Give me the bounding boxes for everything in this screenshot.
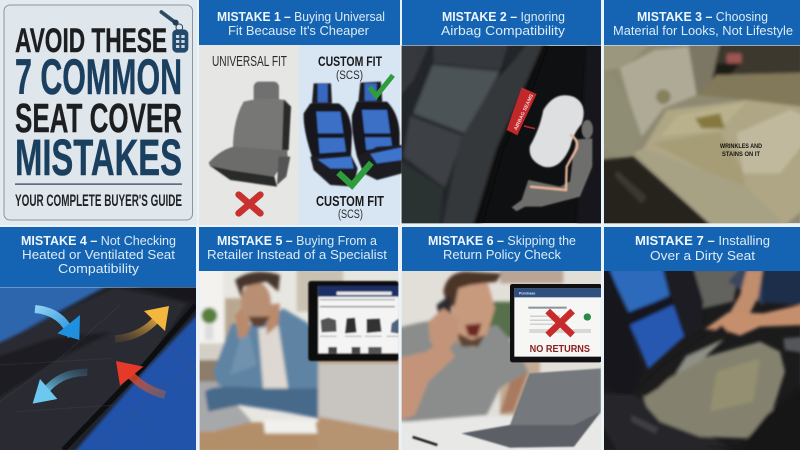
photo: leather seat with airbag [402,46,601,224]
icon: green check top [370,75,393,96]
airbag illustration [530,95,584,167]
arrow: light blue cooling bottom [33,372,87,404]
header: mistake 4 [0,227,196,287]
icon: green check bottom [338,163,371,185]
heading: mistake 1 line 2: Fit Because It's Cheaper [228,23,370,38]
panel: mistake 3 [600,0,800,230]
heading: mistake 3 line 1: MISTAKE 3 – Choosing [637,9,768,24]
laptop screen: no returns: Purchase [519,291,535,295]
header: mistake 3 [604,0,800,45]
header: mistake 1 [199,0,400,45]
custom side background [299,45,400,225]
subtitle: YOUR COMPLETE BUYER'S GUIDE [15,191,182,210]
grey universal seat [209,82,291,187]
panel: mistake 5 [197,227,405,450]
seated mannequin illustration [512,120,593,211]
header: mistake 5 [199,227,398,271]
laptop with online store [308,281,399,361]
heading: mistake 5 line 2: Retailer Instead of a Specialist [207,247,387,262]
heading: mistake 7 line 2: Over a Dirty Seat [650,248,755,263]
photo: installing cover over dirty seat [600,268,800,450]
header: mistake 2 [402,0,601,45]
label: no returns: NO RETURNS [530,344,590,355]
label: scs bottom: (SCS) [338,209,363,221]
heading: mistake 5 line 1: MISTAKE 5 – Buying From a [217,233,378,248]
heading: mistake 6 line 2: Return Policy Check [443,247,561,262]
photo: worn stained leather seat [600,40,800,230]
heading: mistake 6 line 1: MISTAKE 6 – Skipping the [428,233,576,248]
panel: mistake 4 [0,227,203,450]
panel: mistake 7 [600,227,800,450]
heading: mistake 4 line 2: Heated or Ventilated Seat [22,247,175,262]
red airbag seams tag [507,87,537,135]
icon: car key [161,12,188,53]
arrow: red heat [116,361,165,395]
heading: mistake 4 line 1: MISTAKE 4 – Not Checking [21,233,176,248]
heading: mistake 3 line 2: Material for Looks, Not Lifestyle [613,23,793,38]
heading: seat cover: SEAT COVER [15,95,182,141]
header: mistake 7 [604,227,800,271]
panel: title [0,0,197,225]
panel: mistake 6 [397,227,607,450]
red airbag seams tag: AIRBAG SEAMS [513,93,535,131]
heading: mistake 4 line 3: Compatibility [58,261,140,276]
annotation: second line: STAINS ON IT [722,152,760,158]
photo: angry man on phone [397,268,607,450]
arrow: orange heat [115,306,169,339]
universal side background [199,45,299,225]
icon: red cross on screen [548,311,573,335]
arrow: blue cooling top [35,309,80,340]
photo: quilted seat fabric with airflow arrows [0,282,203,450]
header: mistake 6 [402,227,601,271]
laptop screen: no returns [510,284,602,362]
heading: mistake 2 line 2: Airbag Compatibility [441,23,566,38]
heading: 7 common: 7 COMMON [15,49,182,105]
label: scs top: (SCS) [336,70,363,82]
photo: stressed man at table [197,268,405,450]
heading: mistake 7 line 1: MISTAKE 7 – Installing [635,233,770,248]
label: custom fit bottom: CUSTOM FIT [316,194,384,210]
label: universal fit: UNIVERSAL FIT [212,54,287,70]
panel: mistake 2 [393,0,607,230]
heading: mistakes: MISTAKES [15,129,182,186]
heading: avoid these: AVOID THESE [15,22,167,60]
foreground laptop [413,368,601,448]
heading: mistake 2 line 1: MISTAKE 2 – Ignoring [442,9,565,24]
icon: red cross [239,195,260,213]
panel: mistake 1 [199,0,402,225]
annotation: wrinkles and stains: WRINKLES AND [720,144,763,150]
blue custom seats [304,82,402,187]
heading: mistake 1 line 1: MISTAKE 1 – Buying Universal [217,9,385,24]
label: custom fit top: CUSTOM FIT [318,53,382,69]
